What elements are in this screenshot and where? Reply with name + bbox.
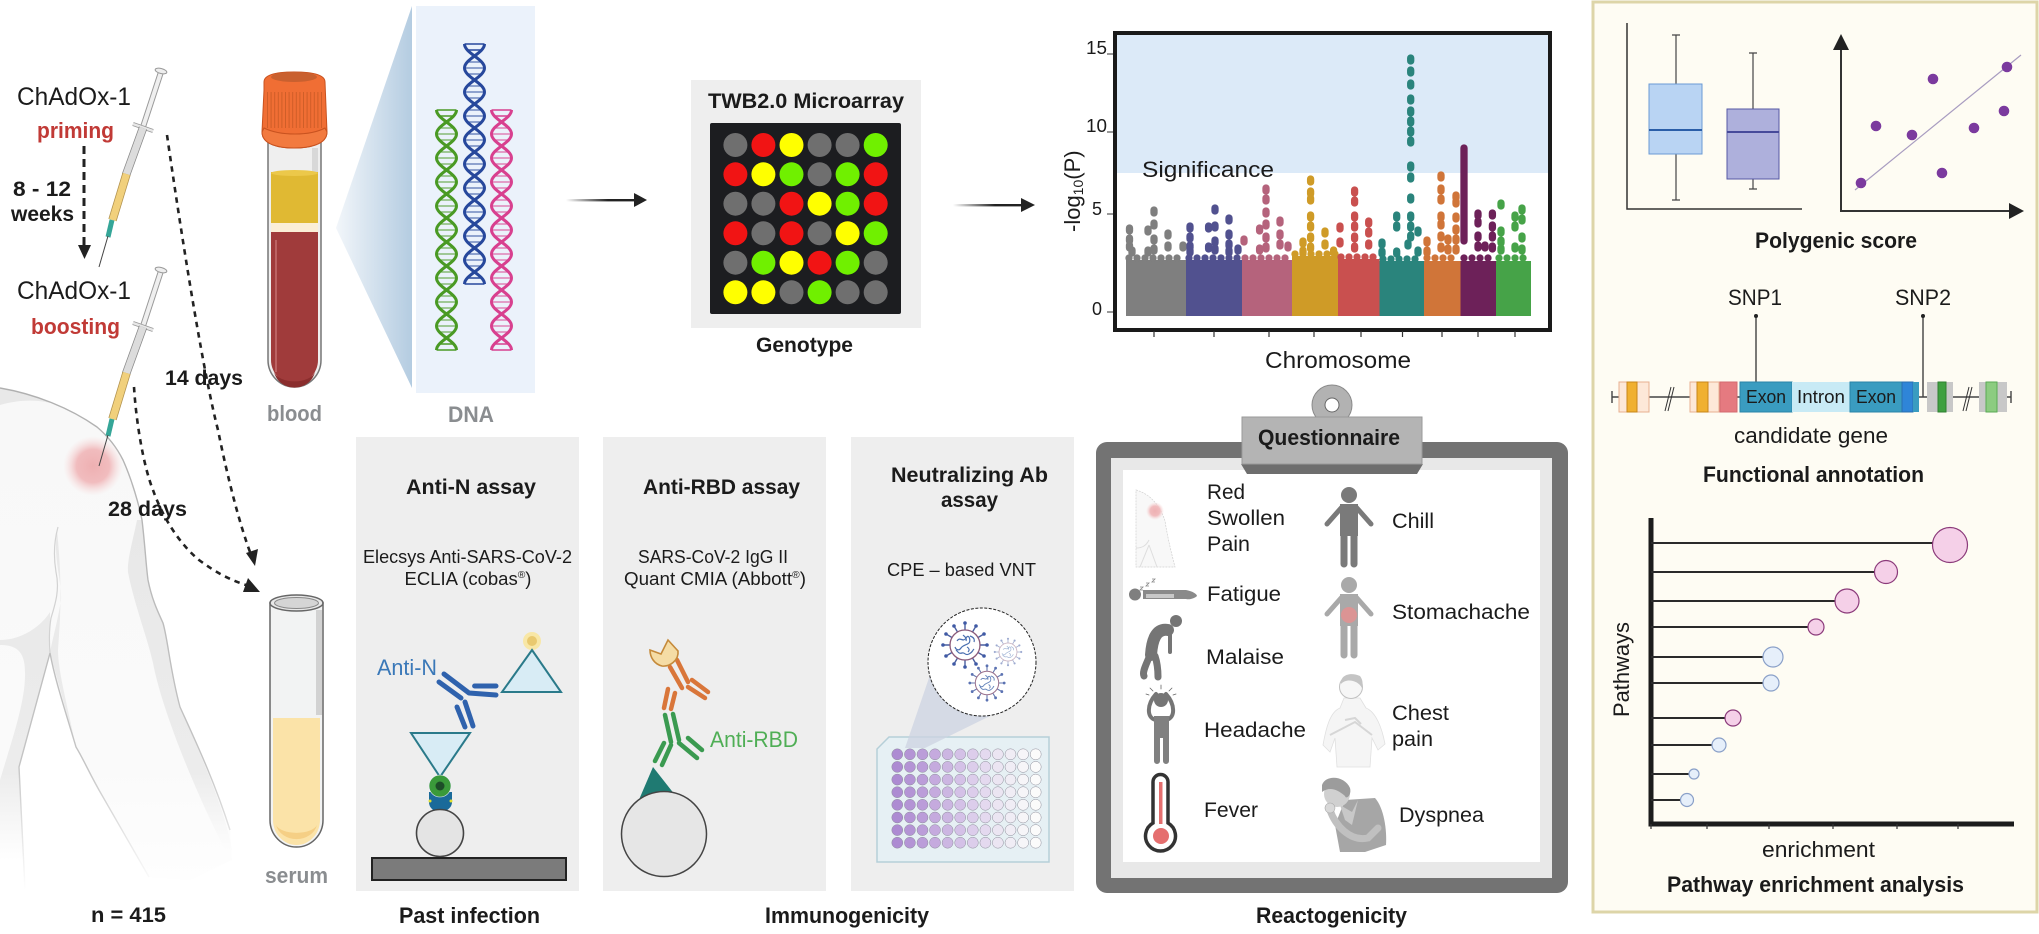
SNP points <box>1129 58 1530 259</box>
label: ChAdOx-1 priming <box>17 83 131 143</box>
text: Stomachache: Stomachache <box>1392 601 1530 624</box>
label: candidate gene: candidate gene <box>1734 423 1888 448</box>
label: Reactogenicity: Reactogenicity <box>1256 903 1408 928</box>
text: Chest pain: pain <box>1392 728 1433 751</box>
label: 28 days: 28 days <box>108 498 187 521</box>
method text: ) <box>525 569 532 589</box>
icon: top antigen with label <box>502 632 561 692</box>
icon: green DNA helix <box>436 110 456 350</box>
injection site redness <box>63 436 123 496</box>
heading: Neutralizing Ab assay: Neutralizing Ab <box>891 464 1048 487</box>
gene diagram: Intron <box>1797 387 1845 407</box>
y-axis label: 10 <box>1070 180 1086 195</box>
heading: Neutralizing Ab assay: assay <box>941 489 998 512</box>
icon: green antibody <box>655 714 702 765</box>
arrow: DNA to microarray <box>566 193 647 207</box>
y-axis label: -log <box>1060 195 1085 232</box>
clipboard clip <box>1241 385 1423 474</box>
label: Past infection: Past infection <box>399 903 540 928</box>
label: blood: blood <box>267 401 322 426</box>
text: Red Swollen Pain <box>1207 481 1285 556</box>
icon: chest pain person <box>1323 674 1385 767</box>
arrow: genotype to Manhattan plot <box>953 198 1035 212</box>
syringe: priming <box>99 67 167 267</box>
icon: bead with antigen <box>622 767 706 876</box>
label: Significance: Significance <box>1142 157 1274 182</box>
icon: headache person <box>1146 685 1176 761</box>
label: serum: serum <box>265 863 328 888</box>
icon: malaise bent person <box>1143 615 1182 677</box>
icon: chill person <box>1327 487 1371 564</box>
text: Headache: Headache <box>1204 719 1306 742</box>
panel: Neutralizing Ab assay <box>851 437 1074 891</box>
y-axis tick labels: 10 <box>1086 116 1107 136</box>
label: ChAdOx-1 boosting <box>17 277 131 339</box>
text: Red Swollen Pain: Red <box>1207 481 1245 504</box>
text: Red Swollen Pain: Pain <box>1207 533 1250 556</box>
microarray chip <box>710 123 901 314</box>
heading: Anti-RBD assay: Anti-RBD assay <box>643 476 800 499</box>
heading: Neutralizing Ab assay <box>891 464 1048 512</box>
label: Anti-N: Anti-N <box>377 655 437 680</box>
label: Polygenic score: Polygenic score <box>1755 228 1917 253</box>
method text: ) <box>800 569 806 589</box>
label: 8 - 12 weeks: weeks <box>10 203 74 226</box>
icon: thermometer <box>1146 774 1176 851</box>
panel: Anti-RBD assay <box>603 437 826 891</box>
label: 14 days: 14 days <box>165 367 243 390</box>
label: DNA: DNA <box>448 402 494 427</box>
SNP2 marker <box>1895 285 1951 397</box>
chromosome bars <box>1126 256 1531 316</box>
text: Malaise: Malaise <box>1206 646 1284 669</box>
gene diagram: Exon <box>1746 387 1786 407</box>
icon: blue DNA helix <box>464 44 484 284</box>
method text <box>363 547 572 589</box>
text: Chest pain <box>1392 702 1449 751</box>
lollipop chart <box>1651 518 2014 829</box>
icon: pink DNA helix <box>492 110 512 350</box>
icon: fatigue lying person <box>1129 579 1197 600</box>
text: Fever: Fever <box>1204 799 1258 822</box>
y-axis tick labels: 15 <box>1086 38 1107 58</box>
method text: ECLIA (cobas <box>404 569 515 589</box>
label: 8 - 12 weeks: 8 - 12 <box>13 178 71 201</box>
y-axis tick labels <box>1086 38 1113 319</box>
icon: bead <box>416 810 464 856</box>
plot frame <box>1115 33 1550 330</box>
panel: Anti-N assay <box>356 437 579 891</box>
panel: TWB2.0 Microarray <box>691 80 921 328</box>
magnifier cone: blood to DNA <box>336 6 412 388</box>
method text: Elecsys Anti-SARS-CoV-2 <box>363 547 572 567</box>
label: 8 - 12 weeks <box>10 178 74 226</box>
text: Chill: Chill <box>1392 510 1434 533</box>
arrow: 28 days to serum <box>134 387 260 592</box>
icon: orange detection antibody <box>650 640 708 709</box>
panel: questionnaire clipboard <box>1096 385 1568 893</box>
label: Pathways: Pathways <box>1609 622 1634 717</box>
label: n = 415: n = 415 <box>91 904 166 927</box>
icon: bottom antigen <box>411 733 470 777</box>
x-axis ticks <box>1154 331 1515 337</box>
label: ChAdOx-1 boosting: ChAdOx-1 <box>17 277 131 305</box>
text: Fatigue: Fatigue <box>1207 583 1281 606</box>
icon: dyspnea person <box>1322 778 1386 852</box>
96-well plate <box>877 737 1049 862</box>
SNP2 marker: SNP2 <box>1895 285 1951 310</box>
method text: ® <box>792 570 800 581</box>
method text: Quant CMIA (Abbott <box>624 569 785 589</box>
label: ChAdOx-1 boosting: boosting <box>31 314 120 339</box>
icon: blue antibody <box>439 674 496 727</box>
magnified virus circle <box>928 608 1036 716</box>
arm and shoulder silhouette <box>0 388 232 934</box>
panel: DNA <box>416 6 535 393</box>
label: Chromosome: Chromosome <box>1265 347 1411 373</box>
panel: downstream analyses <box>1593 2 2037 912</box>
label: Genotype: Genotype <box>756 334 853 357</box>
label: Anti-RBD: Anti-RBD <box>710 727 798 752</box>
box plot <box>1627 23 1802 209</box>
heading: Questionnaire: Questionnaire <box>1258 425 1400 450</box>
arrow: 14 days to serum <box>167 135 258 566</box>
text: Red Swollen Pain: Swollen <box>1207 507 1285 530</box>
label: Pathway enrichment analysis: Pathway enrichment analysis <box>1667 872 1964 897</box>
heading: Anti-N assay: Anti-N assay <box>406 476 536 499</box>
label: Immunogenicity: Immunogenicity <box>765 903 930 928</box>
method text: SARS-CoV-2 IgG II <box>638 547 788 567</box>
serum tube <box>270 595 323 847</box>
method text: ® <box>518 570 526 581</box>
y-axis label: (P) <box>1060 150 1085 180</box>
heading: TWB2.0 Microarray: TWB2.0 Microarray <box>708 90 904 113</box>
method text: CPE – based VNT <box>887 560 1036 580</box>
magnifier cone <box>905 675 990 748</box>
gene diagram: Exon <box>1856 387 1896 407</box>
icon: solid phase <box>372 858 566 880</box>
icon: capture complex <box>428 775 452 812</box>
text: Dyspnea: Dyspnea <box>1399 804 1484 827</box>
label: enrichment: enrichment <box>1762 837 1875 862</box>
syringe: boosting <box>99 266 167 466</box>
Manhattan plot <box>1060 33 1550 373</box>
method text <box>624 547 806 589</box>
SNP1 marker <box>1728 285 1782 382</box>
text: Chest pain: Chest <box>1392 702 1449 725</box>
scatter plot <box>1833 34 2024 219</box>
y-axis tick labels: 5 <box>1092 199 1102 219</box>
SNP1 marker: SNP1 <box>1728 285 1782 310</box>
label: ChAdOx-1 priming: ChAdOx-1 <box>17 83 131 111</box>
label: Functional annotation: Functional annotation <box>1703 462 1924 487</box>
icon: red swollen shoulder <box>1136 490 1175 567</box>
label: ChAdOx-1 priming: priming <box>37 118 114 143</box>
arrow: priming to boosting <box>78 146 91 259</box>
blood tube <box>262 72 327 388</box>
y-axis tick labels: 0 <box>1092 299 1102 319</box>
icon: stomachache person <box>1327 577 1371 655</box>
gene diagram <box>1612 382 2011 412</box>
